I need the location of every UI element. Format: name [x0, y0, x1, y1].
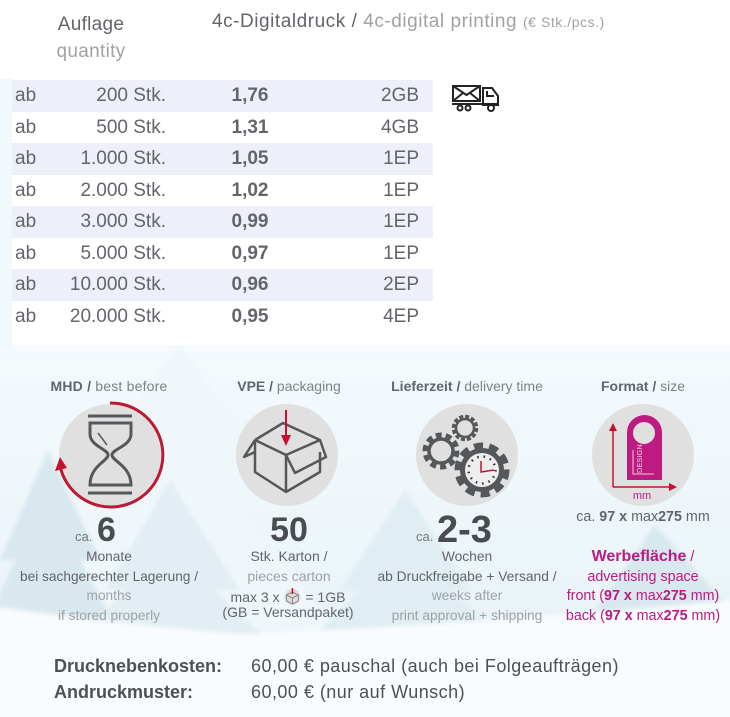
description: Stk. Karton / [250, 548, 328, 564]
row 1000: ab [15, 148, 36, 169]
row 20000: 20.000 Stk. [70, 306, 166, 326]
number: 2-3 [437, 509, 492, 551]
row 2000: 1,02 [232, 180, 268, 200]
panel: best before [20, 378, 198, 623]
heading: quantity: Auflage [58, 14, 124, 35]
description [377, 549, 557, 623]
row 5000 [12, 238, 433, 269]
description: pieces carton [247, 568, 331, 584]
row 5000: 0,97 [232, 242, 268, 264]
description: ab Druckfreigabe + Versand / [377, 568, 557, 584]
row 3000: 1EP [383, 211, 419, 232]
row 3000: 0,99 [232, 211, 268, 232]
row 10000: ab [15, 274, 36, 295]
row 10000: 0,96 [232, 274, 268, 295]
row 200: 200 Stk. [96, 85, 166, 106]
row 500: 500 Stk. [96, 116, 166, 138]
row 5000: 1EP [383, 242, 419, 264]
row 2000: 1EP [383, 180, 419, 200]
row 10000: 2EP [383, 274, 419, 295]
row 20000: 4EP [383, 306, 419, 326]
row 10000: 10.000 Stk. [70, 274, 166, 295]
print costs: 60,00 € pauschal (auch bei Folgeaufträgen) [251, 656, 619, 676]
heading: digital printing: 4c-Digitaldruck / 4c-digital printing (€ Stk./pcs.) [212, 11, 605, 32]
description: Monate [86, 549, 132, 564]
heading: quantity: quantity [57, 41, 125, 62]
proof sample: Andruckmuster: [54, 682, 193, 702]
row 3000 [12, 206, 433, 238]
footer costs [54, 656, 619, 702]
heading: VPE / packaging [237, 378, 341, 394]
number: 6 [97, 511, 116, 549]
icon: box [236, 404, 338, 506]
description: bei sachgerechter Lagerung / [20, 568, 198, 584]
row 200: ab [15, 85, 36, 106]
row 1000: 1,05 [232, 148, 268, 169]
number: 50 [270, 511, 308, 549]
row 1000 [12, 143, 433, 174]
packaging note: max 3 x = 1GB [231, 589, 345, 605]
icon: door hanger with dimensions: mm [633, 490, 651, 502]
icon: mail truck [452, 85, 499, 112]
icon: door hanger with dimensions [592, 404, 694, 506]
packaging note: (GB = Versandpaket) [222, 604, 354, 620]
description: weeks after [432, 588, 502, 603]
label: ca. [416, 529, 433, 544]
row 20000: 0,95 [232, 306, 268, 326]
price table [12, 80, 433, 326]
row 3000: ab [15, 211, 36, 232]
row 3000: 3.000 Stk. [80, 211, 166, 232]
row 10000 [12, 269, 433, 300]
row 500: 4GB [381, 116, 419, 138]
size value: ca. 97 x max275 mm [576, 509, 710, 525]
row 2000 [12, 174, 433, 206]
row 5000: 5.000 Stk. [80, 242, 166, 264]
proof sample: 60,00 € (nur auf Wunsch) [251, 682, 465, 702]
label: ca. [75, 529, 92, 544]
panel: delivery time [377, 378, 557, 623]
description: if stored properly [58, 608, 160, 622]
icon: door hanger with dimensions: DESIGN [635, 444, 644, 473]
row 200 [12, 80, 433, 112]
panel: packaging [222, 378, 354, 620]
print costs: Drucknebenkosten: [54, 656, 222, 676]
row 500: 1,31 [232, 116, 268, 138]
description [247, 548, 331, 584]
heading: Format / size [601, 378, 685, 394]
packaging note [222, 588, 354, 620]
advertising space: back (97 x max275 mm) [566, 608, 720, 624]
row 2000: 2.000 Stk. [80, 180, 166, 200]
description: months [87, 588, 131, 603]
row 500 [12, 112, 433, 143]
panel: size [566, 378, 720, 624]
heading: Lieferzeit / delivery time [391, 378, 543, 394]
row 20000 [12, 300, 433, 332]
description: print approval + shipping [392, 608, 542, 622]
row 5000: ab [15, 242, 36, 264]
proof sample [54, 682, 465, 702]
advertising space: Werbefläche / [592, 548, 694, 565]
row 500: ab [15, 116, 36, 138]
row 200: 1,76 [232, 85, 268, 106]
description: Wochen [442, 549, 492, 564]
icon: hourglass [55, 402, 164, 508]
advertising space: front (97 x max275 mm) [567, 588, 719, 604]
row 1000: 1.000 Stk. [80, 148, 166, 169]
icon: gears and clock [416, 404, 518, 506]
print costs [54, 656, 619, 676]
row 1000: 1EP [383, 148, 419, 169]
description [20, 549, 198, 623]
row 2000: ab [15, 180, 36, 200]
heading: MHD / best before [50, 378, 168, 394]
row 20000: ab [15, 306, 36, 326]
row 200: 2GB [381, 85, 419, 106]
advertising space: advertising space [587, 568, 699, 584]
advertising space [566, 548, 720, 624]
heading: quantity [57, 14, 125, 62]
